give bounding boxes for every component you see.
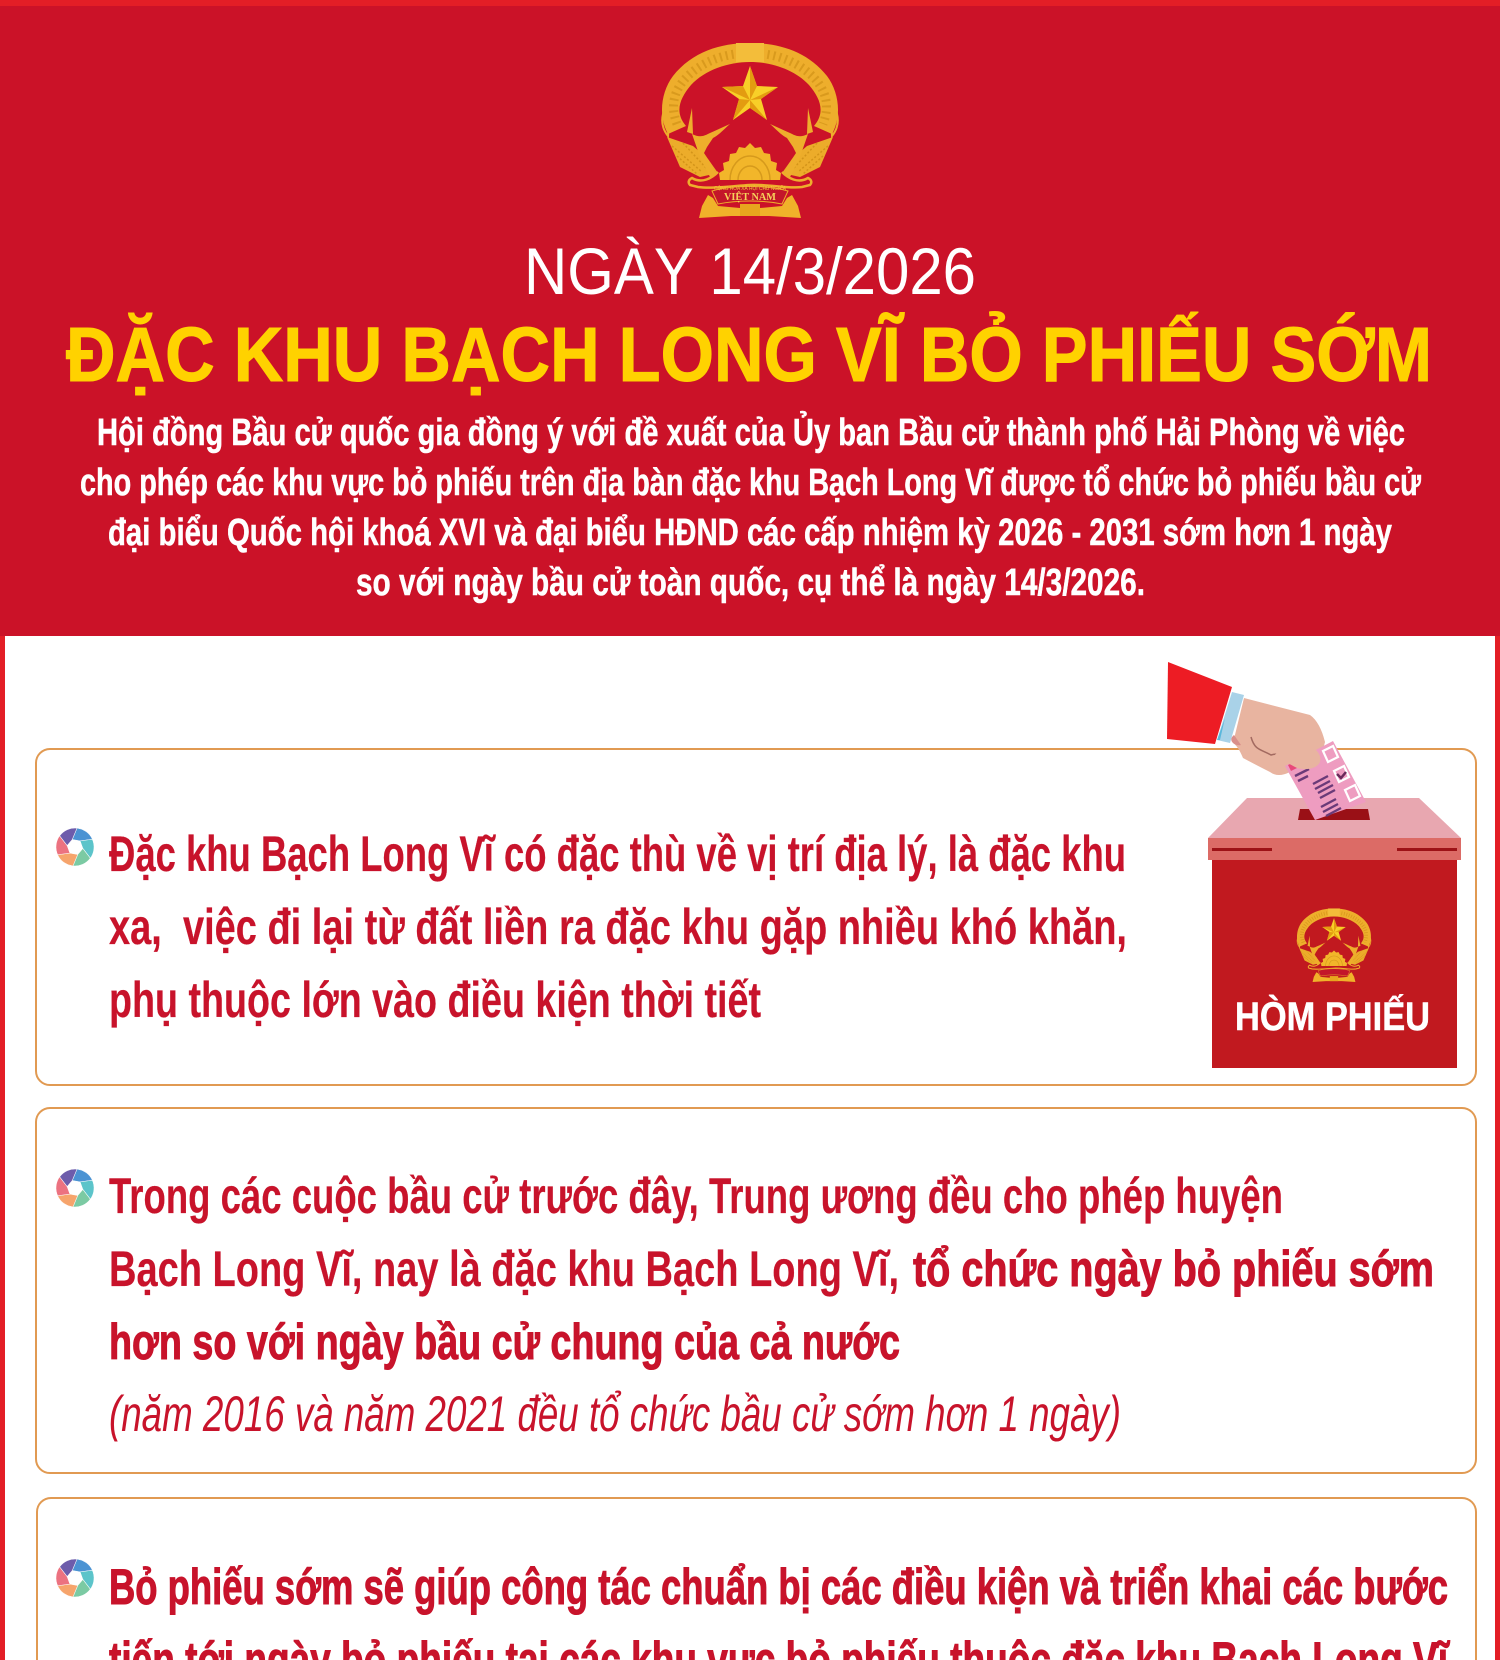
panel: card 3	[37, 1498, 1476, 1660]
box body	[1212, 860, 1457, 1068]
panel: card 1	[36, 749, 1476, 1085]
icon: emblem on box	[1297, 908, 1371, 982]
text block: card 1 text: phụ thuộc lớn vào điều kiện thời tiết	[109, 972, 761, 1028]
hand and sleeve	[1167, 662, 1325, 775]
text block: card 1 text: xa, việc đi lại từ đất liền ra đặc khu gặp nhiều khó khăn,	[109, 899, 1127, 955]
icon: aperture bullet 3	[50, 1553, 100, 1603]
icon: aperture bullet 2	[50, 1163, 100, 1213]
panel: header	[0, 6, 1500, 636]
icon: national emblem: CỘNG HÒA XÃ HỘI CHỦ NGHĨA	[714, 185, 786, 192]
box band	[1208, 838, 1461, 860]
box lid top	[1208, 798, 1461, 838]
text block: card 3 text	[109, 1559, 1450, 1660]
text block: card 1 text	[109, 826, 1127, 1028]
icon: ballot box with hand	[1167, 662, 1461, 1068]
title: date: NGÀY 14/3/2026	[524, 234, 976, 308]
text block: card 2 text: (năm 2016 và năm 2021 đều tổ chức bầu cử sớm hơn 1 ngày)	[109, 1386, 1121, 1442]
text block: card 2 text: Bạch Long Vĩ, nay là đặc khu Bạch Long Vĩ,	[109, 1241, 899, 1297]
ballot slot	[1298, 809, 1370, 820]
ballot paper	[1285, 741, 1366, 820]
icon: aperture bullet 1	[50, 822, 100, 872]
panel: card 2	[36, 1108, 1476, 1473]
text block: card 2 text: hơn so với ngày bầu cử chung của cả nước	[109, 1314, 900, 1370]
text block: intro paragraph: so với ngày bầu cử toàn quốc, cụ thể là ngày 14/3/2026.	[356, 562, 1145, 604]
thumb	[1273, 723, 1320, 769]
text block: card 1 text: Đặc khu Bạch Long Vĩ có đặc thù về vị trí địa lý, là đặc khu	[109, 826, 1126, 882]
box label: HÒM PHIẾU	[1235, 993, 1430, 1039]
text block: intro paragraph	[80, 410, 1421, 604]
text block: card 2 text	[109, 1168, 1434, 1442]
icon: national emblem: VIỆT NAM	[724, 190, 777, 203]
icon: national emblem	[662, 43, 838, 218]
